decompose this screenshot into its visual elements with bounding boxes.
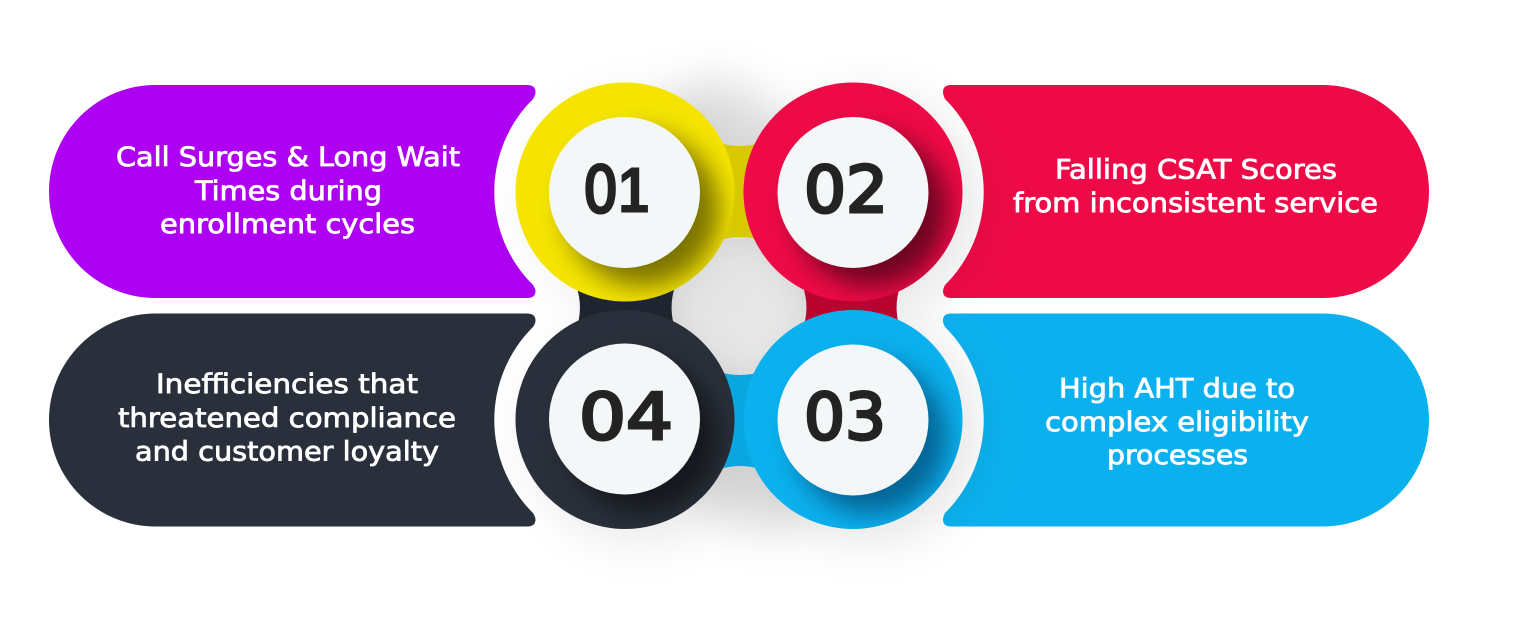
badge 01 [516,82,734,302]
number 03: 03 [804,381,886,455]
connector: yellow [715,141,765,242]
connector: red [802,285,900,330]
connector: blue [715,370,765,471]
text: falling CSAT: from inconsistent service [1013,188,1378,219]
infographic [49,68,1429,550]
text: high AHT: High AHT due to [1059,374,1295,404]
text: call surges: enrollment cycles [160,209,415,240]
connector: dark [576,285,676,330]
text: call surges [116,142,460,240]
text: inefficiencies [118,369,456,468]
text: falling CSAT: Falling CSAT Scores [1055,154,1337,186]
text: call surges: Call Surges & Long Wait [116,142,460,173]
number 04: 04 [579,381,673,455]
panel: falling CSAT [943,85,1429,298]
text: high AHT: complex eligibility [1045,407,1309,438]
panel: inefficiencies [49,314,536,526]
number 01: 01 [583,154,649,228]
badge 04 [516,310,734,529]
badge 02 [744,82,962,302]
text: inefficiencies: Inefficiencies that [156,369,418,400]
panel: call surges [49,85,536,298]
text: inefficiencies: threatened compliance [118,403,456,434]
text: high AHT: processes [1107,440,1248,471]
badge 03 [744,310,962,529]
background shadow [528,65,980,547]
panel: high AHT [943,314,1429,526]
text: falling CSAT [1013,154,1378,219]
text: inefficiencies: and customer loyalty [135,436,439,468]
number 02: 02 [804,154,888,228]
text: call surges: Times during [194,176,382,207]
text: high AHT [1045,374,1309,471]
